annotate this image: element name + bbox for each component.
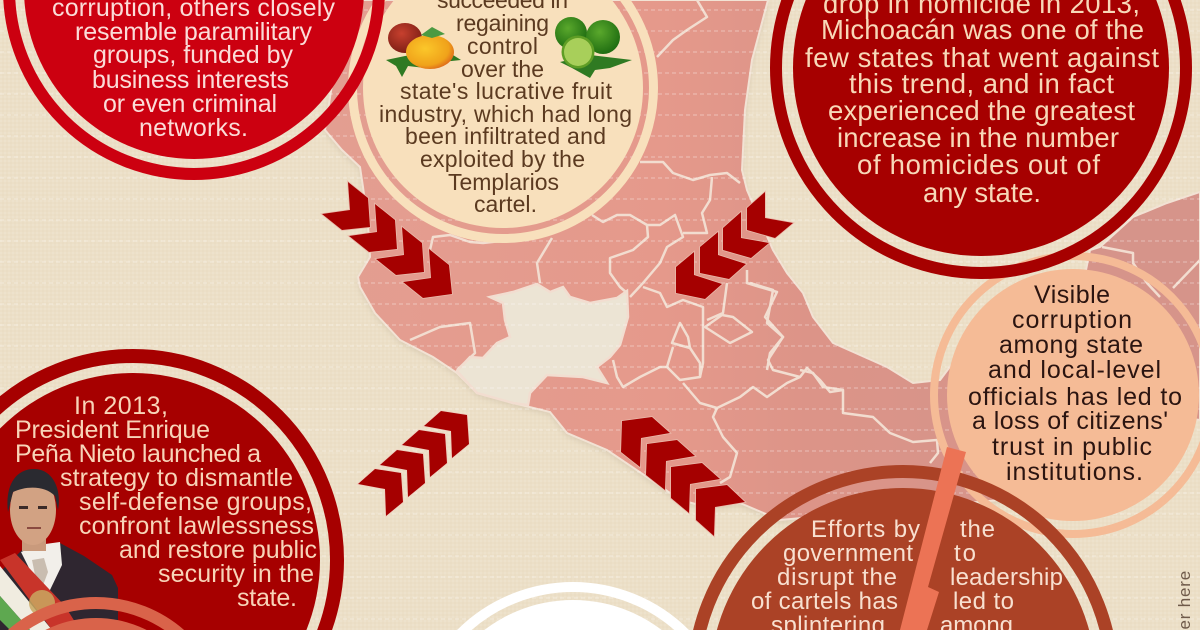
text: strategy [15, 392, 317, 612]
panel: bottom orange circle [0, 603, 224, 630]
circle disc [24, 0, 364, 159]
text: corruption: and local-level [988, 356, 1161, 384]
panel: self-defense groups circle [9, 0, 379, 174]
text: corruption [968, 281, 1182, 486]
chevrons: bottom left [358, 411, 469, 516]
text: homicide: any state. [923, 177, 1041, 208]
panel: homicide circle [776, 0, 1186, 273]
text: self-defense groups: networks. [139, 114, 248, 142]
text: cartel splintering: Efforts by [811, 516, 920, 543]
text: strategy: In 2013, [74, 392, 168, 420]
text: corruption: institutions. [1006, 458, 1143, 486]
circle ring [776, 0, 1186, 273]
text: corruption: corruption [1012, 306, 1132, 334]
circle ring [352, 0, 654, 238]
text: fruit industry: cartel. [474, 191, 537, 217]
text: cartel splintering [751, 516, 1063, 630]
text: fruit industry: exploited by the [420, 146, 585, 172]
text: strategy: and restore public [119, 536, 317, 564]
text: fruit industry: over the [461, 56, 544, 82]
circle disc [793, 0, 1169, 256]
circle disc [363, 0, 643, 228]
chevrons: top left [322, 182, 452, 298]
text: cartel splintering: leadership [950, 564, 1063, 591]
text: homicide [805, 0, 1159, 208]
circle ring [0, 603, 224, 630]
panel: Peña Nieto strategy circle [0, 356, 337, 630]
text: homicide: this trend, and in fact [849, 68, 1114, 99]
text: fruit industry: Templarios [448, 169, 559, 195]
text: cartel splintering: of cartels has [751, 588, 898, 615]
text: strategy: state. [237, 584, 297, 612]
text: strategy: security in the [158, 560, 314, 588]
chevrons: bottom right [621, 417, 745, 536]
text: strategy: strategy to dismantle [60, 464, 293, 492]
state borders [410, 0, 1200, 483]
circle ring [9, 0, 379, 174]
text: fruit industry: control [467, 33, 538, 59]
text: homicide: experienced the greatest [828, 95, 1135, 126]
circle disc [427, 600, 719, 630]
Yucatan land mass [1060, 192, 1200, 420]
text: strategy: Peña Nieto launched a [15, 440, 261, 468]
text: corruption: a loss of citizens' [972, 407, 1168, 435]
text: corruption: Visible [1034, 281, 1110, 309]
text: fruit industry: state's lucrative fruit [400, 78, 613, 104]
text: corruption: trust in public [992, 433, 1152, 461]
text: fruit industry [379, 0, 632, 217]
circle ring [0, 356, 337, 630]
text: homicide: increase in the number [837, 122, 1119, 153]
text: self-defense groups: or even criminal [103, 90, 277, 118]
text: corruption: among state [999, 331, 1143, 359]
text: cartel splintering: government [783, 540, 913, 567]
circle ring [694, 472, 1112, 630]
circle disc [0, 618, 209, 630]
text: corruption: officials has led to [968, 383, 1182, 411]
text: self-defense groups: groups, funded by [93, 41, 294, 69]
circle disc [710, 488, 1096, 630]
panel: corruption circle [934, 256, 1200, 534]
chevrons: top right [676, 192, 793, 299]
text: homicide: few states that went against [805, 42, 1159, 73]
portrait: President Peña Nieto [0, 469, 118, 630]
panel: cartel splintering circle [694, 447, 1112, 630]
text: strategy: President Enrique [15, 416, 210, 444]
icon: lightning crack [900, 447, 966, 630]
icon: limes [555, 17, 632, 78]
circle disc [0, 373, 320, 630]
panel: fruit industry circle [352, 0, 654, 238]
circle ring [414, 587, 732, 630]
text: self-defense groups [52, 0, 336, 142]
text: fruit industry: industry, which had long [379, 101, 632, 127]
icon: mangoes [386, 23, 461, 77]
text: homicide: of homicides out of [857, 149, 1100, 180]
text: cartel splintering: disrupt the [777, 564, 897, 591]
text: homicide: Michoacán was one of the [821, 14, 1144, 45]
text: fruit industry: regaining [456, 10, 549, 36]
map of Mexico [325, 0, 1200, 523]
text: fruit industry: been infiltrated and [405, 123, 606, 149]
text: cartel splintering: the [960, 516, 995, 543]
circle disc [947, 269, 1199, 521]
text: cartel splintering: led to [953, 588, 1014, 615]
text: cartel splintering: to [954, 540, 976, 567]
land mass [325, 0, 1000, 520]
circle ring [934, 256, 1200, 534]
state: Michoacan highlighted [457, 284, 628, 405]
text: self-defense groups: business interests [92, 66, 289, 94]
text: strategy: self-defense groups, [79, 488, 312, 516]
text: self-defense groups: resemble paramilitary [75, 18, 312, 46]
text: strategy: confront lawlessness [79, 512, 314, 540]
panel: bottom white circle [414, 587, 732, 630]
